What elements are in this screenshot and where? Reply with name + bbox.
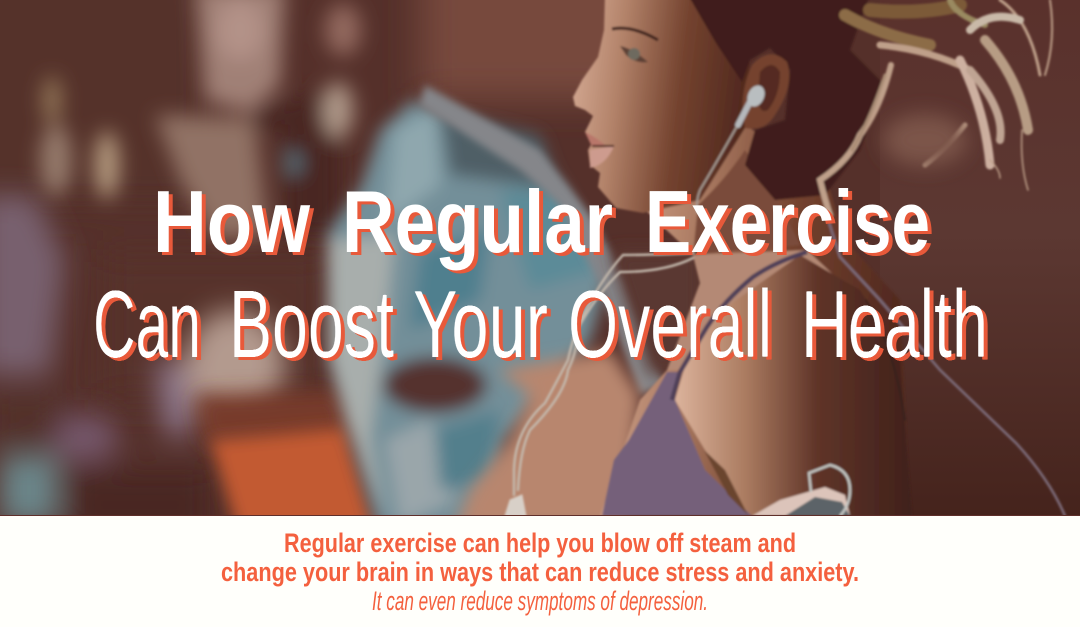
title line 1 shadow: [157, 175, 934, 274]
title line 1 text: [153, 172, 930, 271]
grey sleeve strip and arm: [420, 85, 665, 395]
title line 2 shadow: Health: [805, 274, 992, 381]
title line 2 text: Health: [801, 271, 988, 378]
subtitle text block: Regular exercise can help you blow off steam and: [284, 528, 796, 558]
ear: [743, 54, 789, 129]
title line 1 shadow: Exercise: [649, 175, 934, 274]
title line 2 text: Overall: [568, 271, 772, 378]
face: [573, 0, 750, 213]
title: [93, 172, 992, 381]
title line 2 shadow: Overall: [572, 274, 776, 381]
title line 2 shadow: Boost: [233, 274, 398, 381]
title line 1 text: Regular: [342, 172, 613, 271]
subtitle text block: It can even reduce symptoms of depression.: [372, 586, 708, 616]
armband phone holder: [752, 465, 850, 516]
orange treadmill floor: [195, 390, 350, 445]
title line 1 text: Exercise: [645, 172, 930, 271]
subtitle text block: [221, 528, 859, 616]
title line 1 shadow: Regular: [346, 175, 617, 274]
eye and brow: [612, 28, 658, 62]
shoulder and upper arm: [675, 255, 912, 516]
woman runner in foreground: [505, 0, 1065, 516]
sports bra top: [602, 372, 752, 516]
title line 2 text: Can: [93, 271, 201, 378]
lips: [585, 132, 614, 168]
title line 2 text: Boost: [229, 271, 394, 378]
muted teal shirt: [327, 100, 610, 530]
neck and chest: [600, 120, 910, 516]
title line 2 text: [93, 271, 988, 378]
title line 1 shadow: How: [157, 175, 314, 274]
title line 2 shadow: Can: [97, 274, 205, 381]
earphone and cords: [505, 83, 1065, 516]
blond hair strands: [820, 0, 1052, 215]
photo bottom edge line: [0, 515, 1080, 516]
title line 2 shadow: [97, 274, 992, 381]
title line 2 shadow: Your: [417, 274, 552, 381]
warm haze by the hair: [883, 114, 967, 166]
subtitle text block: change your brain in ways that can reduce stress and anxiety.: [221, 557, 859, 587]
title line 1 text: How: [153, 172, 310, 271]
armpit shadow: [704, 450, 748, 515]
title line 2 text: Your: [413, 271, 548, 378]
hair: [688, 0, 885, 200]
